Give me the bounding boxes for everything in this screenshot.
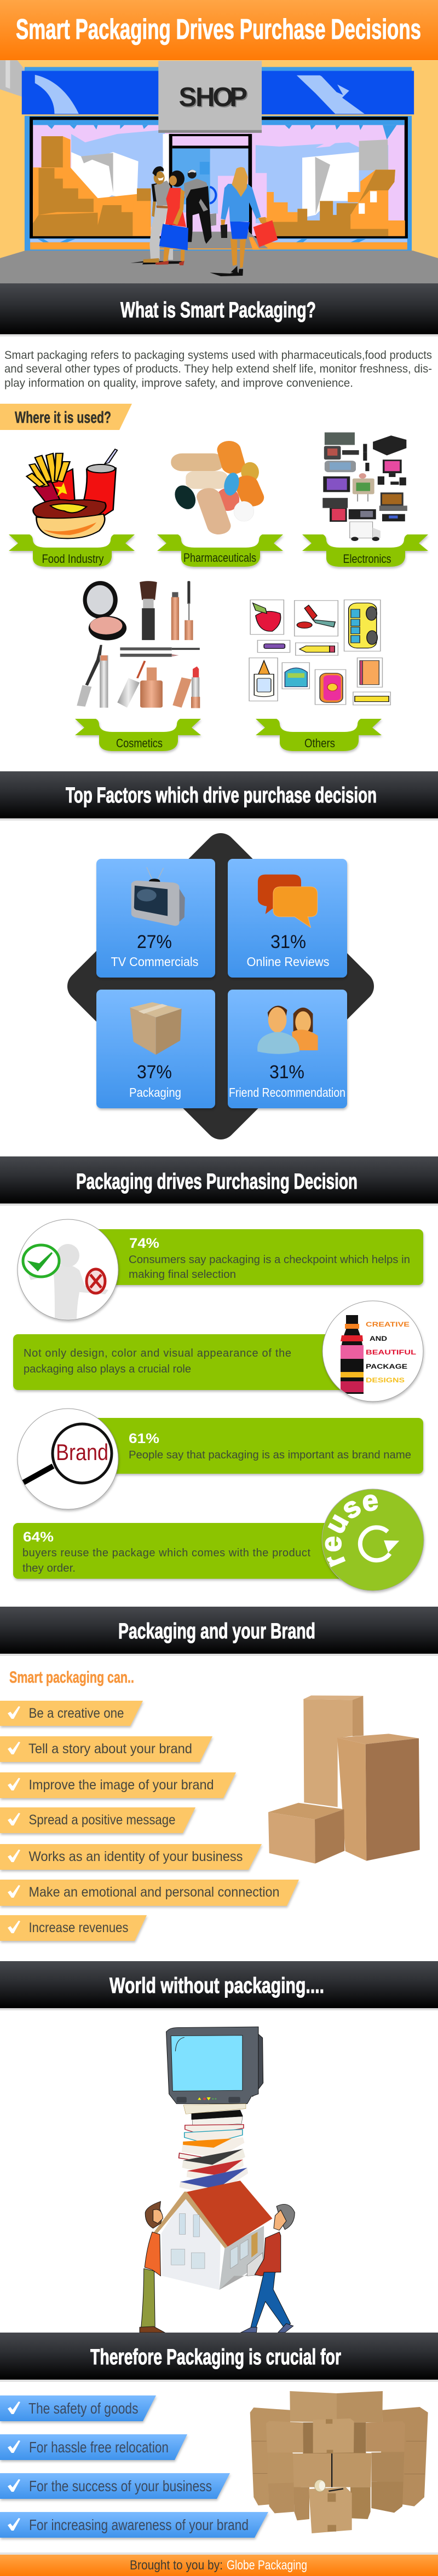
- stat bar: 74%: making final selection: [129, 1269, 236, 1281]
- card: online reviews: Online Reviews: [246, 955, 330, 969]
- item: message: [0, 1807, 195, 1833]
- stack of books: [179, 2104, 248, 2195]
- intro paragraph: [4, 349, 432, 389]
- ribbon: food industry: Food Industry: [42, 552, 104, 566]
- item: message: Spread a positive message: [28, 1812, 175, 1828]
- ribbon: cosmetics: Cosmetics: [116, 736, 163, 750]
- item: creative: Be a creative one: [28, 1706, 124, 1721]
- item: safety: The safety of goods: [28, 2400, 138, 2417]
- circle: creative bottle designs: CREATIVE: [366, 1321, 410, 1328]
- shop illustration: SHOP: [179, 83, 247, 112]
- card: packaging: [96, 990, 215, 1108]
- icon: television: [131, 867, 185, 926]
- circle: reuse badge: [321, 1489, 426, 1594]
- section header: therefore packaging is crucial: Therefore Packaging is crucial for: [90, 2345, 341, 2369]
- left person: [140, 2201, 165, 2333]
- circle: brand magnifier: Brand: [56, 1439, 108, 1465]
- card: tv commercials: [96, 859, 215, 978]
- section header: what is smart packaging: [0, 283, 438, 336]
- list: why packaging is crucial: [0, 2395, 268, 2538]
- section header: world without packaging: [0, 1961, 438, 2010]
- tag: where it is used: [0, 404, 132, 430]
- card: online reviews: 31%: [270, 932, 306, 952]
- item: awareness: For increasing awareness of your brand: [29, 2516, 249, 2533]
- circle: creative bottle designs: DESIGNS: [366, 1376, 405, 1384]
- item: image: Improve the image of your brand: [28, 1777, 214, 1793]
- intro paragraph: and several other types of products. They help extend shelf life, monitor freshness, dis-: [4, 363, 432, 375]
- footer credit: [0, 2552, 438, 2576]
- stat bar: 64%: buyers reuse the package which comes with the product: [22, 1547, 310, 1559]
- subheading: smart packaging can: Smart packaging can..: [9, 1668, 134, 1687]
- item: safety: [0, 2395, 156, 2421]
- footer credit: Globe Packaging: [227, 2558, 307, 2573]
- stat bar: 64%: 64%: [23, 1530, 54, 1545]
- item: connection: [0, 1880, 299, 1906]
- item: revenues: Increase revenues: [28, 1920, 128, 1935]
- intro paragraph: Smart packaging refers to packaging systems used with pharmaceuticals,food products: [4, 349, 432, 362]
- stat bar: 61%: 61%: [129, 1431, 159, 1446]
- circle: figure with check and cross: [18, 1219, 118, 1320]
- ribbon: cosmetics: [75, 719, 201, 751]
- item: awareness: [0, 2512, 268, 2538]
- icon: food: [26, 449, 117, 538]
- section header: therefore packaging is crucial: [0, 2333, 438, 2382]
- circle: reuse badge: reuse: [325, 1495, 378, 1568]
- stat bar: design and colour: Not only design, color and visual appearance of the: [24, 1347, 291, 1359]
- card: packaging: 37%: [137, 1062, 172, 1083]
- list: smart packaging benefits: [0, 1701, 299, 1941]
- item: creative: [0, 1701, 143, 1726]
- section header: packaging and your brand: [0, 1607, 438, 1656]
- stat bar: 74%: Consumers say packaging is a checkpoint which helps in: [129, 1254, 410, 1266]
- stat bar: design and colour: packaging also plays a crucial role: [24, 1363, 191, 1375]
- card: tv commercials: TV Commercials: [111, 955, 198, 969]
- right person: [241, 2204, 295, 2333]
- circle: creative bottle designs: AND: [370, 1335, 387, 1342]
- card: friend recommendation: 31%: [269, 1062, 304, 1083]
- footer credit: Brought to you by:: [130, 2558, 223, 2573]
- icon: cardboard box: [130, 1002, 182, 1055]
- section header: top factors: [0, 771, 438, 821]
- item: story: Tell a story about your brand: [28, 1741, 192, 1757]
- circle: creative bottle designs: PACKAGE: [366, 1363, 407, 1370]
- section header: what is smart packaging: What is Smart Packaging?: [120, 298, 316, 322]
- item: revenues: [0, 1915, 147, 1941]
- blonde woman: [210, 167, 278, 276]
- circle: brand magnifier: [18, 1409, 118, 1509]
- card: friend recommendation: Friend Recommendation: [229, 1085, 345, 1100]
- television on top: [166, 2027, 263, 2104]
- shop illustration: SHOP: [180, 84, 249, 113]
- dark diamond backdrop: [83, 848, 359, 1124]
- icon: others school supplies: [249, 600, 390, 705]
- shop illustration: [0, 60, 438, 283]
- couple: [130, 166, 188, 265]
- intro paragraph: play information on quality, improve safety, and improve convenience.: [4, 377, 353, 389]
- icon: two people: [257, 1005, 318, 1054]
- stat bar: 74%: [66, 1229, 423, 1285]
- stat bar: design and colour: [13, 1334, 353, 1390]
- ribbon: others: [256, 719, 382, 751]
- ribbon: food industry: [9, 534, 135, 567]
- icon: speech bubbles: [258, 875, 318, 928]
- circle: creative bottle designs: BEAUTIFUL: [366, 1348, 416, 1356]
- section header: world without packaging: World without packaging....: [110, 1974, 324, 1998]
- item: image: [0, 1772, 236, 1798]
- card: tv commercials: 27%: [137, 932, 172, 952]
- section header: packaging and your brand: Packaging and your Brand: [118, 1619, 315, 1643]
- stat bar: 61%: [66, 1418, 423, 1474]
- item: identity: [0, 1844, 262, 1870]
- item: connection: Make an emotional and personal connection: [28, 1885, 279, 1900]
- stat bar: 61%: People say that packaging is as important as brand name: [129, 1449, 411, 1461]
- section header: packaging drives purchasing decision: [0, 1156, 438, 1206]
- item: relocation: For hassle free relocation: [29, 2439, 169, 2456]
- stat bar: 64%: they order.: [22, 1562, 76, 1574]
- ribbon: pharmaceuticals: [157, 534, 283, 567]
- image: pile of cardboard boxes: [250, 2391, 428, 2533]
- image: three cardboard boxes: [268, 1695, 420, 1864]
- item: success: [0, 2473, 230, 2499]
- man walking in: [184, 170, 216, 244]
- item: story: [0, 1736, 212, 1762]
- stat bar: 64%: [13, 1523, 353, 1579]
- icon: pills: [171, 439, 267, 536]
- title banner: [0, 0, 438, 60]
- tag: where it is used: Where it is used?: [15, 409, 111, 427]
- circle: creative bottle designs: [322, 1301, 423, 1402]
- stat bar: 74%: 74%: [129, 1236, 159, 1251]
- ribbon: others: Others: [304, 736, 335, 750]
- shoppers in front of the shop: [130, 166, 278, 276]
- ribbon: electronics: [302, 534, 428, 567]
- ribbon: pharmaceuticals: Pharmaceuticals: [183, 551, 256, 565]
- icon: cosmetics: [77, 581, 200, 708]
- icon: electronics: [322, 432, 407, 541]
- item: relocation: [0, 2434, 187, 2460]
- card: packaging: Packaging: [129, 1085, 181, 1100]
- ribbon: electronics: Electronics: [343, 552, 391, 566]
- illustration: people carrying house, books and tv: [140, 2027, 295, 2333]
- card: online reviews: [228, 859, 347, 978]
- house: [152, 2180, 272, 2290]
- item: identity: Works as an identity of your business: [28, 1849, 243, 1864]
- item: success: For the success of your business: [29, 2478, 212, 2494]
- card: friend recommendation: [228, 990, 347, 1108]
